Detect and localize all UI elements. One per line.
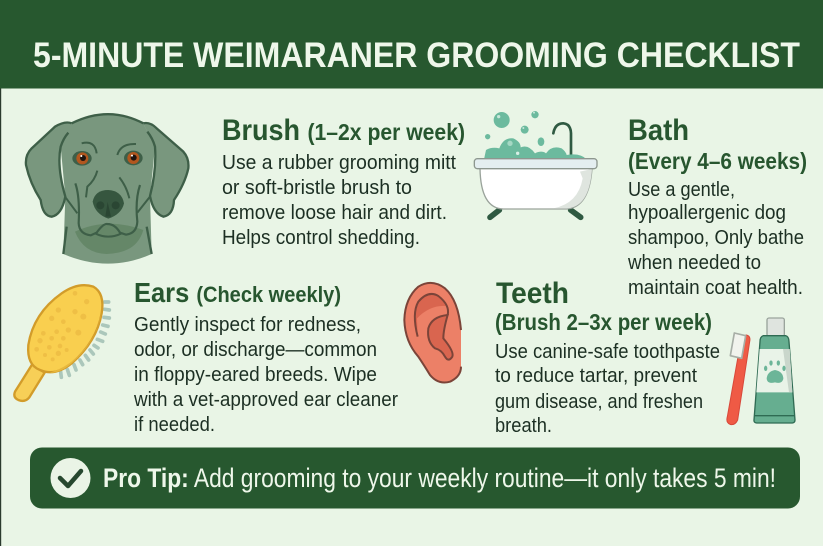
text: Bath description: hypoallergenic dog [628, 202, 786, 224]
heading: Bath: Bath [628, 114, 689, 147]
text: Ears description: odor, or discharge—common [134, 339, 377, 361]
text: Teeth description [495, 341, 720, 437]
text: Bath description: maintain coat health. [628, 277, 803, 299]
title banner [0, 0, 823, 88]
text: Teeth description: Use canine-safe toothpaste [495, 341, 720, 363]
text: Ears description [133, 314, 398, 436]
text: Brush description: or soft-bristle brush to [222, 177, 412, 199]
icon: check circle [50, 458, 90, 498]
heading: Bath: (Every 4–6 weeks) [628, 148, 807, 174]
text: Ears description: in floppy-eared breeds. Wipe [134, 364, 377, 386]
text: Ears description: if needed. [134, 414, 215, 436]
text: Bath description: shampoo, Only bathe [628, 227, 804, 249]
text: Bath description [627, 179, 804, 299]
pro tip bar [30, 448, 800, 508]
icon: toothbrush and toothpaste [727, 318, 795, 425]
heading: Teeth [495, 277, 712, 335]
icon: bathtub with bubbles [474, 111, 597, 217]
text: Brush description: remove loose hair and dirt. [222, 202, 447, 224]
text: Bath description: Use a gentle, [628, 179, 735, 201]
heading: Teeth: (Brush 2–3x per week) [495, 309, 712, 335]
text: Brush description: Helps control shedding. [222, 227, 420, 249]
text: Teeth description: gum disease, and freshen [495, 391, 703, 413]
icon: yellow brush [14, 285, 109, 401]
text: Brush description: Use a rubber grooming mitt [222, 152, 456, 174]
heading: Bath [628, 114, 807, 174]
text: Ears description: Gently inspect for redness, [134, 314, 361, 336]
heading: Brush: Brush (1–2x per week) [222, 114, 465, 147]
icon: weimaraner dog head [26, 114, 188, 264]
heading: Ears: Ears (Check weekly) [134, 277, 341, 308]
text: Bath description: when needed to [627, 252, 761, 274]
text: Teeth description: to reduce tartar, prevent [495, 365, 697, 387]
icon: ear [404, 283, 461, 382]
text: Teeth description: breath. [495, 415, 552, 437]
heading: Teeth: Teeth [496, 277, 569, 310]
text: Ears description: with a vet-approved ear cleaner [133, 389, 398, 411]
text: Brush description [222, 152, 456, 249]
